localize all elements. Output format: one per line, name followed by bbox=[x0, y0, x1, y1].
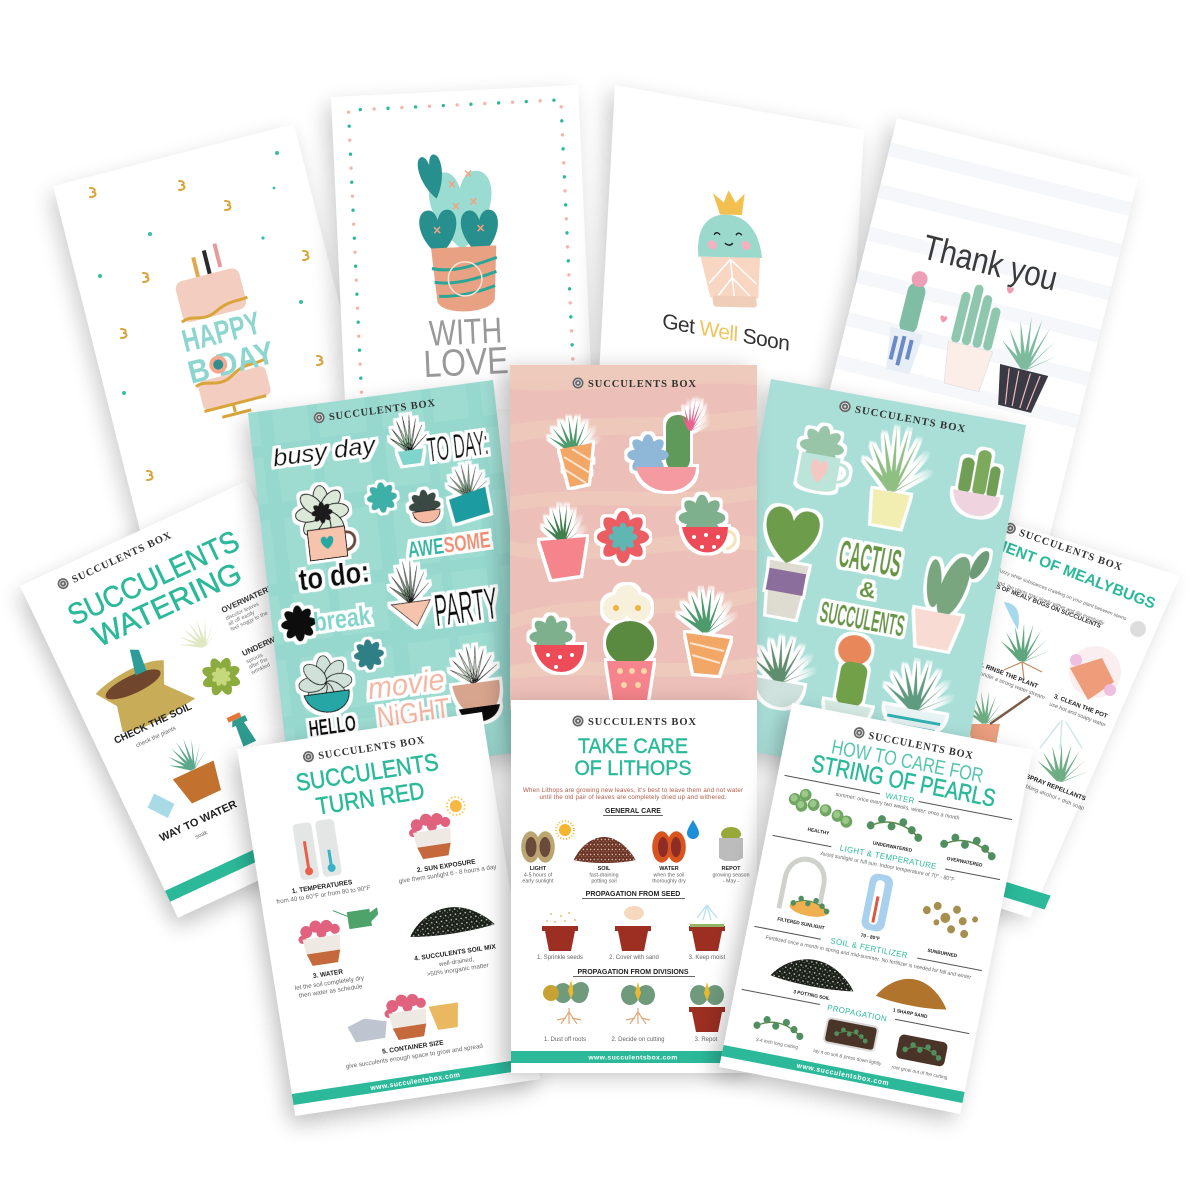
sticker: succulent in pink pot bbox=[540, 504, 586, 579]
title: OF LITHOPS bbox=[574, 757, 692, 780]
title: TREATMENT OF MEALYBUGS bbox=[944, 517, 1158, 613]
item: rinse the plant: 2. RINSE THE PLANT bbox=[978, 661, 1039, 690]
section: soil and fertilizer: 1 SHARP SAND bbox=[892, 1007, 928, 1020]
section: light and temperature: LIGHT & TEMPERATURE bbox=[839, 843, 938, 871]
title bbox=[809, 733, 1001, 813]
item: soil: fast-draining bbox=[589, 872, 619, 878]
footer bar: www.succulentsbox.com bbox=[369, 1072, 461, 1092]
illustration: birthday cake with candles bbox=[159, 236, 286, 423]
title: SUCCULENTS bbox=[294, 749, 440, 797]
item: succulents soil mix: 4. SUCCULENTS SOIL MIX bbox=[414, 943, 497, 963]
sticker: cactus and succulents lettering bbox=[818, 531, 919, 643]
item: keep moist bbox=[689, 905, 726, 961]
section: water: WATER bbox=[885, 791, 915, 806]
item: dust off roots: 1. Dust off roots bbox=[544, 1037, 586, 1043]
title: STRING OF PEARLS bbox=[809, 750, 998, 813]
illustration: birthday cake with candles: B DAY bbox=[184, 334, 278, 391]
sticker: haworthia orange pot bbox=[548, 416, 599, 487]
card: with love bbox=[325, 85, 593, 417]
item: clean the pot: 3. CLEAN THE POT bbox=[1053, 693, 1108, 720]
item: succulents soil mix bbox=[407, 901, 501, 980]
sticker: red dotted cup bbox=[679, 495, 735, 552]
item: way to water: WAY TO WATER bbox=[158, 798, 239, 844]
item: check the soil sack: check the plants bbox=[135, 726, 177, 749]
text: intro paragraph bbox=[523, 787, 743, 801]
item: keep moist: 3. Keep moist bbox=[689, 955, 726, 961]
illustration: smiling cactus with crown bbox=[692, 190, 767, 308]
item: dust off roots bbox=[543, 980, 589, 1043]
section: water: OVERWATERED bbox=[946, 856, 983, 869]
logo: SUCCULENTS BOX bbox=[70, 530, 173, 586]
item: cover with sand: 2. Cover with sand bbox=[609, 955, 659, 961]
item: container size bbox=[336, 984, 484, 1070]
item: underwatered: after the bbox=[248, 657, 269, 671]
title: SUCCULENTS bbox=[63, 525, 244, 632]
text: introduction: fuzzy white substances crawling on your plant between stems bbox=[998, 568, 1128, 622]
section: propagation bbox=[732, 986, 970, 1084]
item: succulents soil mix: >50% inorganic matter bbox=[426, 962, 489, 978]
item: rinse the plant bbox=[978, 602, 1054, 701]
item: overwatered bbox=[172, 581, 289, 656]
item: water bbox=[284, 904, 389, 1000]
item: container size: 5. CONTAINER SIZE bbox=[382, 1039, 445, 1056]
section: soil and fertilizer: SOIL & FERTILIZER bbox=[830, 936, 909, 960]
sticker: anchor cup plant bbox=[877, 655, 958, 738]
sticker: hello cup: HELLO bbox=[307, 710, 357, 742]
title: TAKE CARE bbox=[578, 735, 688, 758]
sticker: spiky plant yellow cup bbox=[852, 422, 938, 532]
sticker: movie night bbox=[365, 643, 504, 736]
sticker: cactus pink cup bbox=[949, 446, 1008, 520]
text: temperatures: 1. TEMPERATURES bbox=[292, 879, 353, 895]
item: sun exposure bbox=[387, 792, 498, 885]
item: sun exposure: 2. SUN EXPOSURE bbox=[416, 858, 477, 874]
item: underwatered: wrinkled bbox=[250, 662, 271, 677]
text: get well soon: Get Well Soon bbox=[662, 310, 790, 356]
item: soil: SOIL bbox=[598, 866, 611, 872]
item: check the soil sack: CHECK THE SOIL bbox=[113, 701, 194, 747]
item: overwatered: OVERWATERED bbox=[220, 581, 280, 615]
item: underwatered: UNDERWATERED bbox=[241, 621, 306, 658]
panel: take care of lithops guide bbox=[503, 700, 757, 1076]
section: soil and fertilizer: 3 POTTING SOIL bbox=[793, 989, 830, 1002]
sticker: break: break bbox=[312, 600, 372, 637]
sticker: today bbox=[388, 405, 490, 475]
item: repot in pot: 3. Repot bbox=[695, 1037, 718, 1043]
text: with love bbox=[421, 310, 509, 386]
item: cover with sand bbox=[609, 906, 659, 961]
sticker: small flower two bbox=[352, 637, 386, 672]
title: HOW TO CARE FOR bbox=[830, 736, 985, 788]
text: temperatures: from 40 to 60°F or from 80 to 90°F bbox=[276, 884, 371, 906]
item: water: thoroughly dry bbox=[652, 878, 686, 884]
heading: general care: GENERAL CARE bbox=[605, 808, 661, 815]
sticker: red cluster rosette bbox=[597, 511, 649, 563]
item: succulents soil mix: well-drained, bbox=[438, 956, 475, 968]
item: sun exposure: give them sunlight 6 - 8 hours a day bbox=[398, 863, 498, 885]
item: underwatered bbox=[195, 618, 317, 703]
item: spray repellants: rubbing alcohol + dish soap bbox=[1020, 782, 1085, 812]
sticker: movie night: NiGHT bbox=[375, 693, 452, 735]
item: repot: REPOT bbox=[722, 866, 741, 872]
item: water: when the soil bbox=[654, 872, 684, 878]
item: clean the pot bbox=[1048, 646, 1121, 729]
sticker: cactus and succulents lettering: & bbox=[857, 577, 878, 604]
sticker: tall cactus with flowers bbox=[603, 585, 654, 707]
item: way to water bbox=[125, 730, 244, 854]
heading: propagation from divisions: PROPAGATION FROM DIVISIONS bbox=[578, 969, 689, 976]
panel: succulents watering guide bbox=[15, 481, 408, 928]
item: repot: growing season bbox=[712, 872, 750, 878]
item: water bbox=[652, 820, 699, 884]
illustration: heart cactus in basket bbox=[416, 151, 502, 314]
section: propagation: 3-4 inch long cutting bbox=[755, 1037, 799, 1051]
item: water: then water as schedule bbox=[298, 983, 363, 1000]
item: light bbox=[521, 821, 574, 884]
illustration: birthday cake with candles: HAPPY bbox=[178, 304, 264, 359]
item: spray repellants: 4. SPRAY REPELLANTS bbox=[1018, 771, 1087, 802]
sticker: awesome bbox=[399, 462, 495, 563]
item: overwatered: all off easily bbox=[227, 610, 256, 627]
item: sprinkle seeds: 1. Sprinkle seeds bbox=[537, 955, 583, 961]
sticker: orange top cactus bbox=[821, 632, 884, 730]
heading: signs of mealy bugs: SIGNS OF MEALY BUGS ON SUCCULENTS bbox=[981, 578, 1102, 630]
title: TURN RED bbox=[314, 777, 426, 821]
item: way to water: soak bbox=[195, 830, 209, 841]
card: thank you bbox=[789, 117, 1138, 590]
sticker: prickly pear pink pot bbox=[909, 538, 994, 656]
illustration: three potted plants bbox=[878, 261, 1071, 416]
sticker: awesome: AWESOME bbox=[406, 527, 492, 563]
panel: treatment of mealybugs guide bbox=[782, 500, 1190, 928]
item: repot in pot bbox=[689, 982, 725, 1043]
section: propagation: lay it on soil & press down lightly bbox=[813, 1048, 882, 1067]
section: soil and fertilizer: Fertilized once a month in spring and mid-summer. No fertilizer is needed for fall and winter bbox=[765, 935, 972, 981]
item: repot bbox=[712, 827, 750, 884]
text: introduction: and, the plants may slowly wither and die eventually bbox=[996, 580, 1106, 627]
sticker: to do with mug bbox=[289, 480, 371, 598]
item: decide on cutting bbox=[611, 982, 665, 1043]
item: decide on cutting: 2. Decide on cutting bbox=[611, 1037, 665, 1043]
item: sprinkle seeds bbox=[537, 912, 583, 961]
logo: SUCCULENTS BOX bbox=[854, 404, 967, 435]
item: overwatered: feel soggy to the bbox=[230, 610, 269, 633]
panel: pink sticker sheet bbox=[502, 365, 757, 710]
item: light: LIGHT bbox=[530, 866, 547, 872]
logo: SUCCULENTS BOX bbox=[1017, 528, 1124, 573]
item: light: 4-5 hours of bbox=[524, 872, 553, 878]
sticker: red cup lower left bbox=[529, 615, 584, 672]
section: light and temperature: 70 - 80°F bbox=[860, 933, 880, 942]
section: light and temperature: Avoid sunlight or full sun. Indoor temperature of 70° - 80°F bbox=[820, 851, 956, 883]
panel: doodle sticker sheet: PARTY bbox=[432, 579, 500, 636]
panel: watercolor cups sticker sheet bbox=[698, 378, 1026, 797]
text: with love: WITH bbox=[428, 310, 503, 354]
item: water: 3. WATER bbox=[312, 969, 344, 980]
logo: SUCCULENTS BOX bbox=[588, 717, 696, 728]
title bbox=[574, 735, 692, 780]
logo: SUCCULENTS BOX bbox=[329, 398, 436, 423]
footer bar bbox=[796, 819, 1051, 909]
footer bar bbox=[721, 1045, 965, 1103]
section: soil and fertilizer bbox=[743, 921, 983, 1030]
logo: SUCCULENTS BOX bbox=[867, 731, 974, 762]
item: check the soil sack bbox=[82, 634, 205, 757]
footer bar bbox=[165, 786, 397, 902]
item: soil: potting soil bbox=[591, 878, 617, 884]
section: light and temperature bbox=[756, 830, 1001, 965]
footer bar: www.succulentsbox.com bbox=[587, 1054, 678, 1062]
panel: how to care for string of pearls guide bbox=[712, 702, 1033, 1122]
item: water: WATER bbox=[659, 866, 679, 872]
icon: seal bbox=[1130, 621, 1146, 637]
panel: doodle sticker sheet bbox=[242, 380, 536, 792]
footer bar bbox=[292, 1057, 539, 1105]
card: get well soon bbox=[591, 84, 864, 460]
sticker: movie night: movie bbox=[366, 663, 446, 706]
section: water: summer: once every two weeks, winter: once a month bbox=[835, 792, 960, 822]
footer bar: www.succulentsbox.com bbox=[795, 1062, 890, 1088]
section: water bbox=[774, 771, 1013, 873]
text: intro paragraph: until the old pair of leaves are completely dried up and withered. bbox=[540, 794, 727, 801]
icon: spray bottle bbox=[227, 711, 257, 748]
sticker: heart mug bbox=[792, 422, 855, 496]
sticker: small flower bbox=[365, 480, 399, 515]
section: propagation: PROPAGATION bbox=[826, 1003, 888, 1024]
sticker: party bbox=[387, 550, 500, 642]
section: water: UNDERWATERED bbox=[872, 840, 913, 854]
section: light and temperature: FILTERED SUNLIGHT bbox=[777, 916, 825, 932]
sticker: to do with mug: to do: bbox=[297, 555, 371, 598]
item: spray repellants bbox=[1018, 720, 1093, 812]
item: plant with tool bbox=[964, 691, 1030, 744]
logo: SUCCULENTS BOX bbox=[318, 735, 426, 762]
dotted border bbox=[348, 100, 574, 406]
item: soil bbox=[574, 837, 636, 884]
item: water: let the soil completely dry bbox=[294, 975, 365, 992]
panel: succulents turn red guide bbox=[231, 712, 542, 1125]
section: propagation: root grow out of the cutting bbox=[891, 1064, 948, 1081]
item: underwatered: sprouts bbox=[245, 652, 264, 665]
item: light: early sunlight bbox=[522, 878, 554, 884]
item: container size: give succulents enough space to grow and spread bbox=[345, 1043, 484, 1070]
section: light and temperature: SUNBURNED bbox=[927, 948, 958, 960]
sticker: hello cup bbox=[296, 652, 358, 742]
item: repot: - May - bbox=[723, 878, 739, 884]
panel: watercolor cups sticker sheet: CACTUS bbox=[836, 533, 904, 585]
panel: doodle sticker sheet: TO DAY: bbox=[425, 424, 490, 470]
sticker: haworthia striped pot bbox=[677, 588, 736, 675]
item: clean the pot: use hot and soapy water bbox=[1048, 702, 1107, 729]
footer bar bbox=[511, 1051, 757, 1063]
text: thank you: Thank you bbox=[919, 228, 1061, 299]
title bbox=[294, 749, 445, 823]
heading: propagation from seed: PROPAGATION FROM SEED bbox=[586, 891, 680, 898]
card: birthday greeting bbox=[47, 124, 390, 566]
sticker: break bbox=[279, 596, 372, 644]
section: water: HEALTHY bbox=[807, 827, 830, 837]
text: with love: LOVE bbox=[423, 340, 509, 386]
title: WATERING bbox=[88, 557, 247, 654]
sticker: busy day: busy day bbox=[272, 431, 379, 472]
sticker: heart cactus coffee cup bbox=[750, 504, 822, 620]
item: overwatered: discolor leaves bbox=[225, 601, 260, 622]
item: rinse the plant: under a strong water stream bbox=[979, 671, 1046, 701]
confetti bbox=[90, 151, 323, 480]
sticker: spotted cup plant bbox=[744, 631, 819, 712]
panel: watercolor cups sticker sheet: SUCCULENTS bbox=[818, 595, 907, 643]
logo: SUCCULENTS BOX bbox=[588, 379, 696, 390]
sticker: cactus in pink bowl bbox=[627, 396, 713, 491]
text: intro paragraph: When Lithops are growing new leaves, it's best to leave them and not water bbox=[523, 787, 743, 794]
icon: thermometers bbox=[292, 818, 342, 881]
